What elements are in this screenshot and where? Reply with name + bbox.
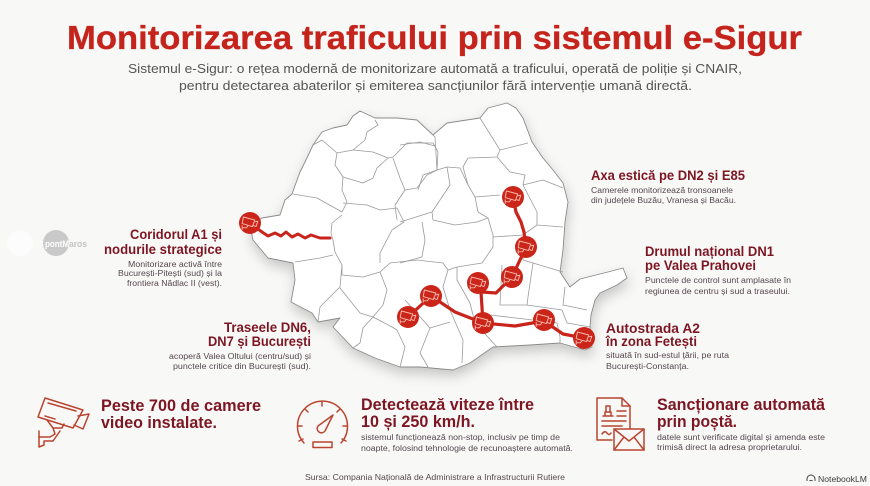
- callout: Traseele DN6: acoperă Valea Oltului (centru/sud) și: [169, 352, 311, 361]
- callout: Axa estica: din județele Buzău, Vranesa și Bacău.: [591, 196, 736, 205]
- callout: Drumul DN1: Drumul național DN1: [645, 244, 774, 259]
- NotebookLM credit: NotebookLM: [818, 474, 867, 484]
- county borders: [293, 118, 590, 367]
- callout: Axa estica: Axa estică pe DN2 și E85: [591, 168, 745, 183]
- stat: speeds: 10 și 250 km/h.: [361, 413, 475, 431]
- callout: Traseele DN6: [169, 320, 311, 371]
- callout: Coridorul A1: frontiera Nădlac II (vest).: [127, 279, 222, 288]
- stat: cameras: video instalate.: [101, 414, 217, 432]
- callout: Drumul DN1: regiunea de centru și sud a traseului.: [645, 287, 790, 296]
- callout: Coridorul A1: București-Pitești (sud) și la: [118, 269, 223, 278]
- stat: cameras: Peste 700 de camere: [101, 397, 261, 415]
- stat: speeds: Detectează viteze între: [361, 396, 534, 414]
- callout: Autostrada A2: în zona Fetești: [605, 334, 697, 349]
- callout: Autostrada A2: [605, 321, 730, 371]
- stat: automatic sanction: prin poștă.: [657, 413, 737, 431]
- map of Romania: [239, 103, 627, 370]
- icon: surveillance camera: [38, 398, 89, 447]
- watermark: aros: [69, 239, 87, 250]
- source: Sursa: Compania Națională de Administrare a Infrastructurii Rutiere: [305, 472, 565, 482]
- callout: Drumul DN1: Punctele de control sunt amplasate în: [645, 276, 791, 285]
- callout: Autostrada A2: București-Constanța.: [606, 362, 689, 371]
- watermark: [7, 230, 87, 256]
- callout: Axa estica: Camerele monitorizează tronsoanele: [591, 186, 734, 195]
- icon: speedometer: [298, 401, 348, 448]
- callout: Drumul DN1: [645, 244, 791, 296]
- stat: speeds: [361, 396, 573, 453]
- callout: Coridorul A1: nodurile strategice: [104, 242, 222, 257]
- callout: Autostrada A2: situată în sud-estul țării, pe ruta: [606, 351, 730, 360]
- callout: Traseele DN6: DN7 și București: [208, 334, 311, 349]
- callout: Axa estica: [591, 168, 745, 205]
- callout: Traseele DN6: punctele critice din București (sud).: [173, 362, 311, 371]
- subtitle: pentru detectarea abaterilor și emiterea sancțiunilor fără intervenție umană directă.: [179, 78, 692, 93]
- title: Monitorizarea traficului prin sistemul e-Sigur: [67, 20, 802, 57]
- subtitle: Sistemul e-Sigur: o rețea modernă de monitorizare automată a traficului, operată de poliție și CNAIR,: [128, 61, 742, 76]
- stat: automatic sanction: trimisă direct la adresa proprietarului.: [657, 443, 802, 452]
- callout: Coridorul A1: [104, 227, 223, 288]
- callout: Autostrada A2: Autostrada A2: [606, 321, 700, 336]
- stat: speeds: sistemul funcționează non-stop, inclusiv pe timp de: [361, 433, 561, 442]
- stat: speeds: noapte, folosind tehnologie de recunoaștere automată.: [361, 444, 573, 453]
- map outline: [250, 103, 627, 370]
- subtitle: [128, 61, 742, 93]
- callout: Coridorul A1: Monitorizare activă între: [128, 260, 223, 269]
- stat: cameras: [101, 397, 261, 432]
- stat: automatic sanction: Sancționare automată: [657, 396, 826, 414]
- callout: Coridorul A1: Coridorul A1 și: [130, 227, 222, 242]
- callout: Traseele DN6: Traseele DN6,: [224, 320, 311, 335]
- watermark: pontM: [45, 239, 69, 250]
- camera pins: [239, 186, 595, 349]
- stat: automatic sanction: datele sunt verificate digital și amenda este: [657, 433, 826, 442]
- icon: document and envelope: [597, 398, 644, 450]
- stat: automatic sanction: [657, 396, 826, 452]
- camera routes: [250, 197, 584, 338]
- callout: Drumul DN1: pe Valea Prahovei: [645, 258, 756, 273]
